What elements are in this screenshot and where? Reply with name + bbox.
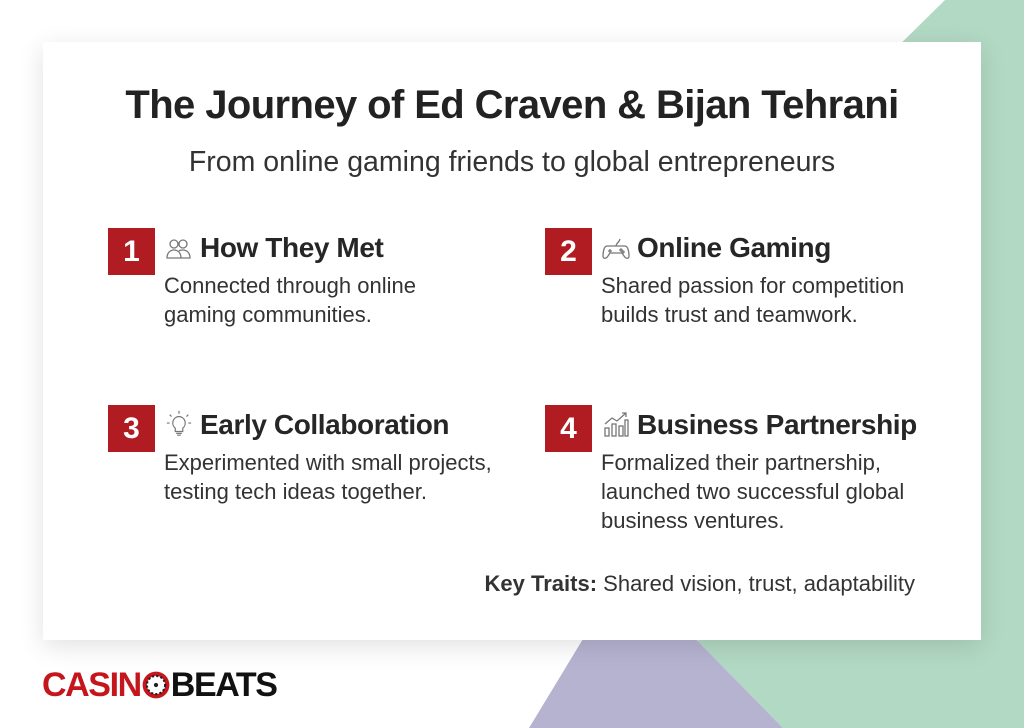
- item 1: How They Met: [200, 232, 383, 263]
- item 1: [108, 228, 416, 327]
- item 4: launched two successful global: [601, 479, 904, 504]
- icon: gamepad: [602, 238, 630, 259]
- item 4: 4: [560, 412, 577, 445]
- item 2: 2: [560, 235, 577, 268]
- title: The Journey of Ed Craven & Bijan Tehrani: [125, 83, 899, 127]
- icon: lightbulb: [166, 410, 192, 436]
- item 1: Connected through online: [164, 273, 416, 298]
- item 4: [545, 405, 917, 533]
- item 1: 1: [123, 235, 140, 268]
- icon: people: [166, 239, 191, 259]
- subtitle: From online gaming friends to global entrepreneurs: [189, 146, 835, 178]
- icon: chart: [604, 412, 629, 437]
- item 2: builds trust and teamwork.: [601, 302, 858, 327]
- item 4: Formalized their partnership,: [601, 450, 881, 475]
- item 1: gaming communities.: [164, 302, 372, 327]
- item 3: Experimented with small projects,: [164, 450, 492, 475]
- item 3: testing tech ideas together.: [164, 479, 427, 504]
- item 3: 3: [123, 412, 140, 445]
- item 4: Business Partnership: [637, 409, 917, 440]
- item 4: business ventures.: [601, 508, 784, 533]
- item 3: [108, 405, 492, 504]
- item 2: Online Gaming: [637, 232, 831, 263]
- logo: CasinoBeats: CASIN BEATS: [42, 666, 277, 704]
- item 2: [545, 228, 904, 327]
- item 2: Shared passion for competition: [601, 273, 904, 298]
- main card: [43, 42, 981, 640]
- key traits: Key Traits: Shared vision, trust, adaptability: [485, 571, 915, 596]
- item 3: Early Collaboration: [200, 409, 449, 440]
